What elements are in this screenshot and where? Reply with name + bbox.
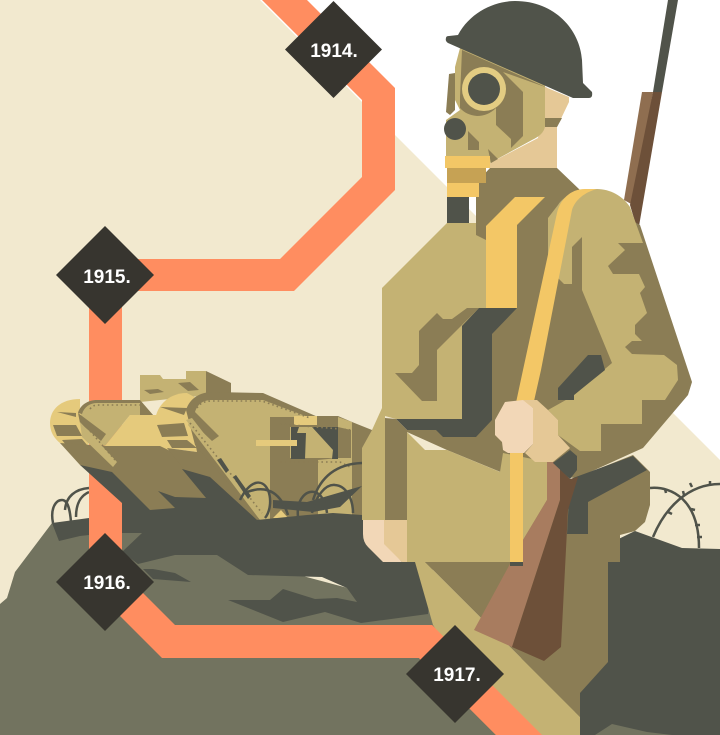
cuff xyxy=(553,450,577,479)
year marker 1917 xyxy=(406,625,504,723)
shoulder strap xyxy=(508,189,597,562)
timeline path xyxy=(89,0,542,735)
year marker 1916: 1916. xyxy=(83,573,131,594)
coat left xyxy=(362,223,486,520)
neck and face xyxy=(490,87,569,168)
barbed wire right xyxy=(650,481,720,548)
coat left column xyxy=(385,418,407,520)
arm light xyxy=(548,189,678,451)
year marker 1914 xyxy=(285,1,382,98)
lapel strap xyxy=(486,197,545,308)
leg dark xyxy=(425,455,650,717)
year marker 1916 xyxy=(56,533,154,631)
rifle upper xyxy=(567,0,678,407)
tank shadow xyxy=(80,465,362,530)
back tank xyxy=(50,371,260,520)
year marker 1915 xyxy=(56,226,154,324)
leg light xyxy=(415,562,580,735)
timeline path over leg xyxy=(400,625,542,735)
right hand xyxy=(495,400,570,462)
dark belt strap xyxy=(396,308,517,437)
soldier xyxy=(362,0,692,735)
rifle stock xyxy=(474,462,578,661)
chin strap xyxy=(545,118,562,127)
coat skirt xyxy=(407,432,547,562)
ground xyxy=(0,495,720,735)
torso dark xyxy=(407,168,692,478)
gas mask xyxy=(444,48,548,223)
arm dark block xyxy=(558,355,605,400)
barbed wire at tank xyxy=(240,463,362,518)
year marker 1917: 1917. xyxy=(433,665,481,686)
front tank xyxy=(155,392,372,520)
helmet xyxy=(446,1,592,98)
year marker 1915: 1915. xyxy=(83,267,131,288)
coat camouflage patch xyxy=(395,308,479,401)
barbed wire left xyxy=(52,488,89,523)
year marker 1914: 1914. xyxy=(310,41,358,62)
left hand xyxy=(363,520,407,562)
waist straps xyxy=(567,456,647,534)
